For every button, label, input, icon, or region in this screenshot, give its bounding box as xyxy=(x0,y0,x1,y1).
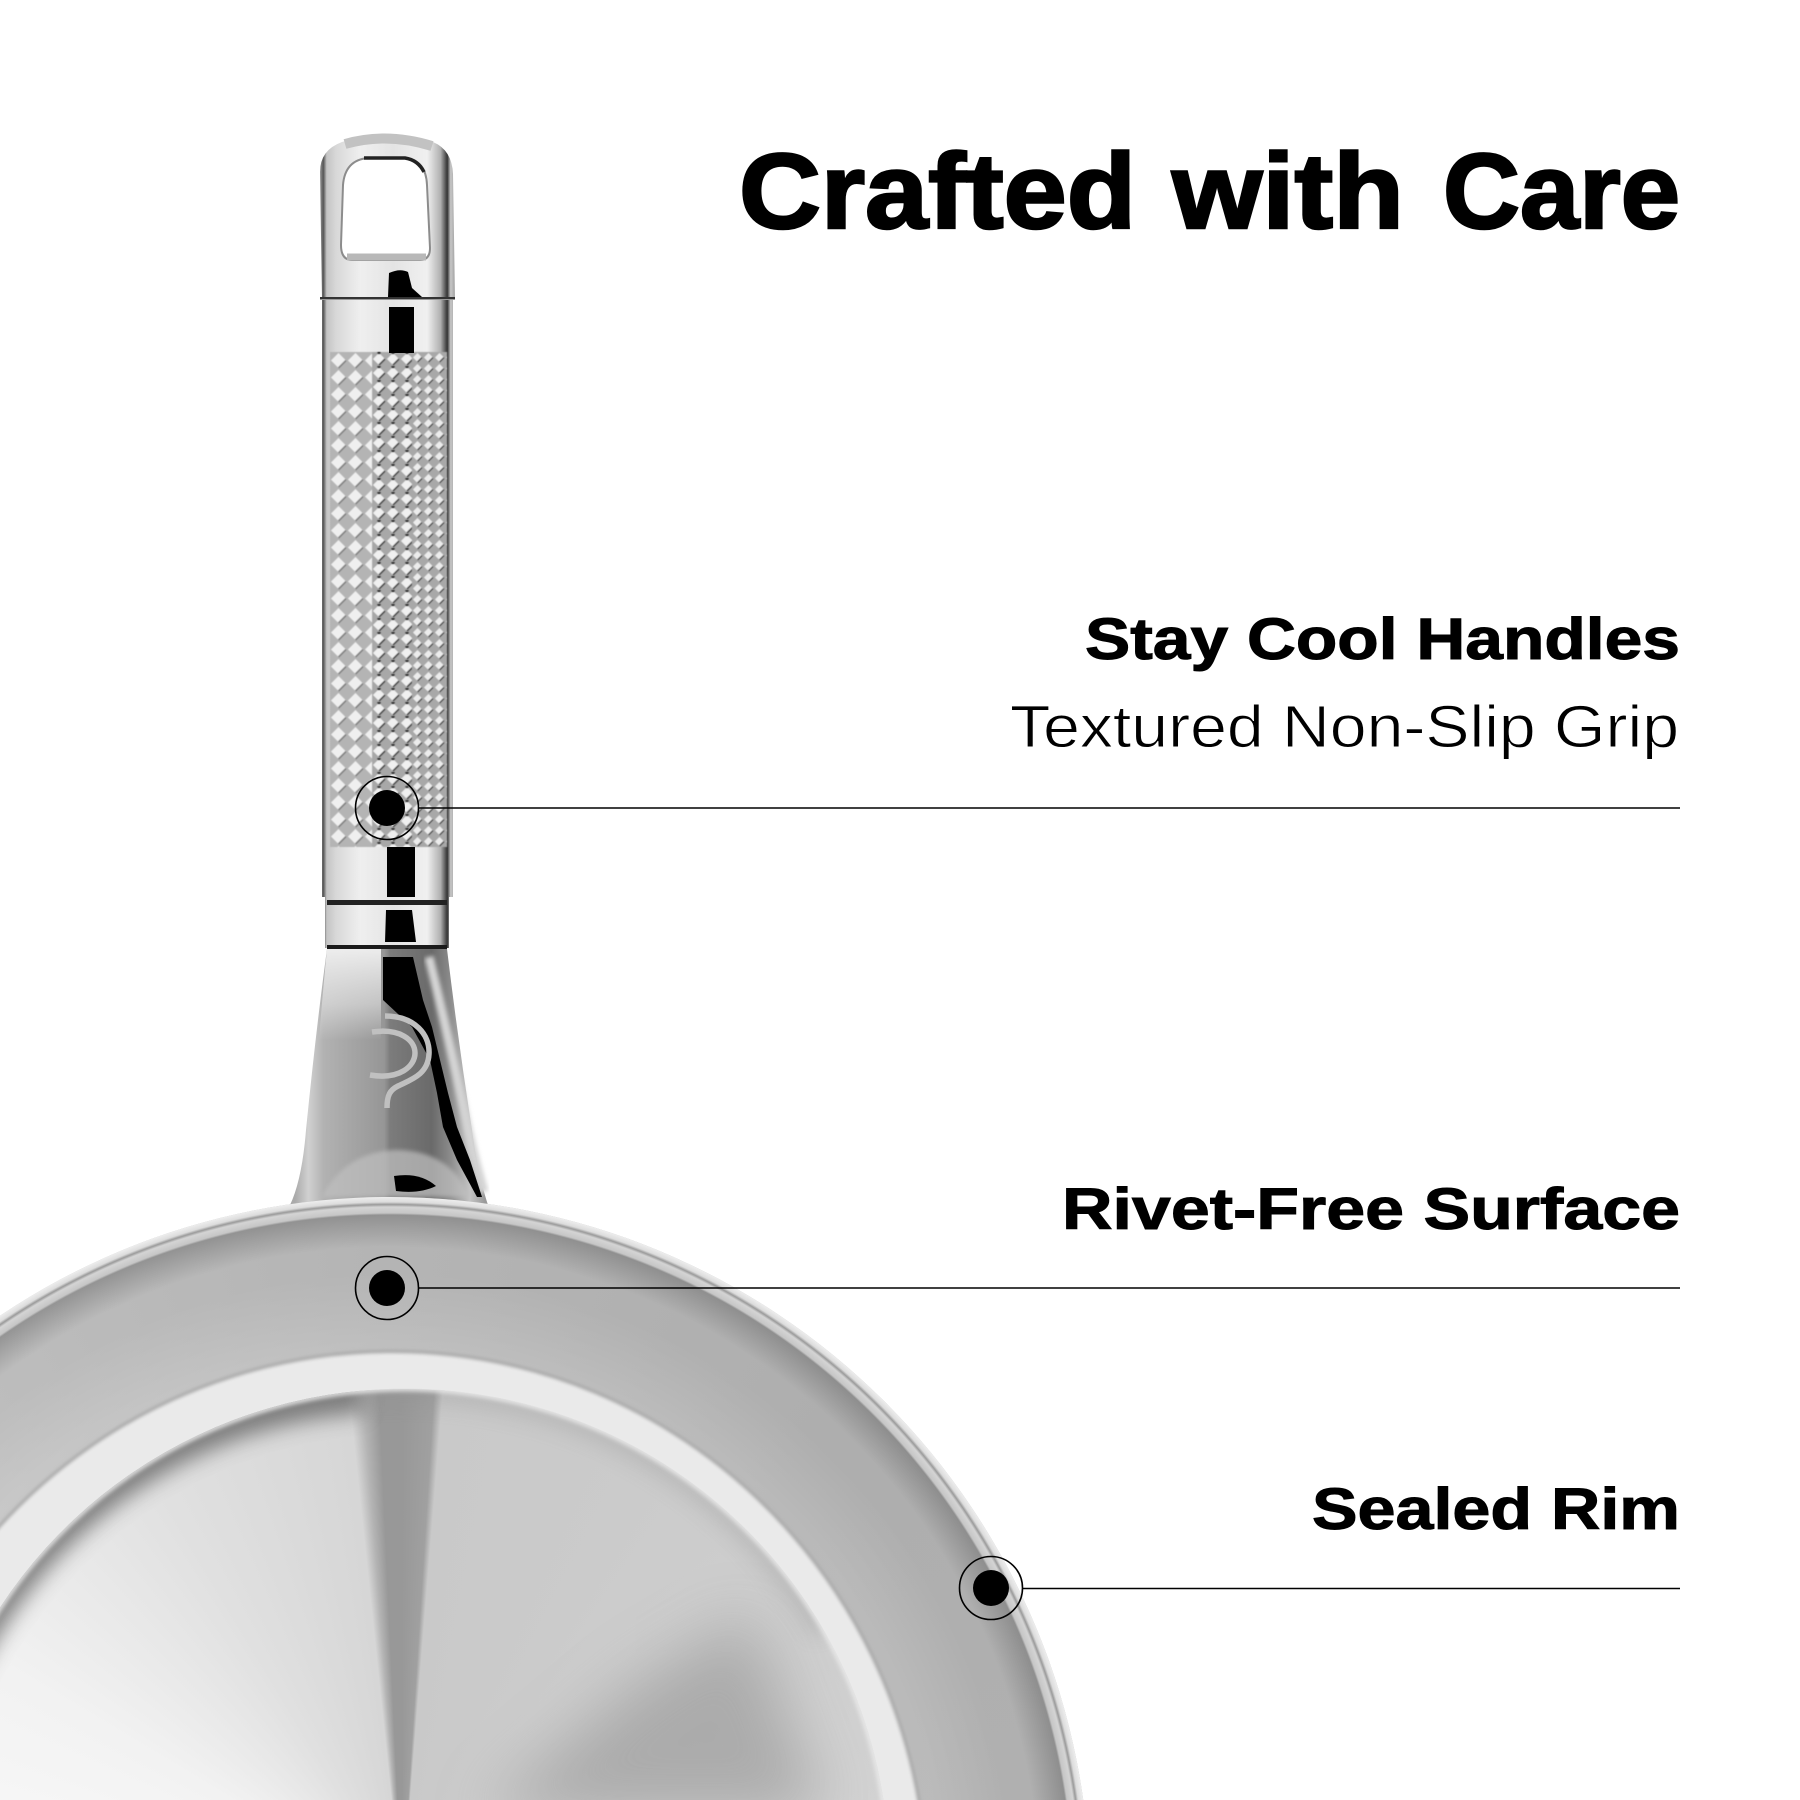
callout: sealed rim: Sealed Rim xyxy=(1312,1477,1680,1542)
callout: stay cool handles xyxy=(356,607,1680,840)
icon: brand logo xyxy=(370,1016,429,1108)
handle grip body xyxy=(322,300,453,897)
pan rim xyxy=(0,1190,1100,1800)
handle collar xyxy=(325,897,449,949)
title: Care xyxy=(1443,131,1680,251)
callout: stay cool handles: Stay Cool Handles xyxy=(1085,607,1680,672)
decorative texture xyxy=(330,352,447,847)
handle neck with logo xyxy=(290,949,488,1205)
callout: rivet-free surface: Rivet-Free Surface xyxy=(1062,1177,1680,1242)
title: with xyxy=(1171,131,1404,251)
callout: stay cool handles: Textured Non-Slip Grip xyxy=(1010,694,1679,760)
pan bright wall band xyxy=(0,1350,920,1800)
illustration: pan body xyxy=(0,1197,1084,1800)
callout: sealed rim xyxy=(960,1477,1680,1620)
title: Crafted xyxy=(739,131,1136,251)
illustration: pan handle xyxy=(290,134,489,1204)
pan floor brushed steel xyxy=(0,1389,884,1800)
callout: rivet-free surface xyxy=(356,1177,1680,1320)
handle eyelet top xyxy=(320,134,455,300)
pan floor shading xyxy=(0,1389,884,1800)
